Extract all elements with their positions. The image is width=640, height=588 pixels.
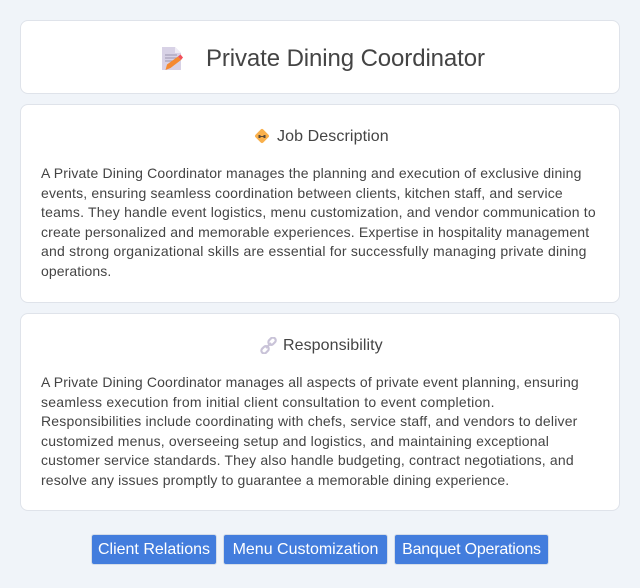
icon: diamond sign (255, 128, 269, 144)
text: job description: A Private Dining Coordinator manages the planning and execution of exclusive dining (41, 165, 582, 181)
text: responsibility: customized menus, overseeing setup and logistics, and maintaining exceptional (41, 433, 549, 449)
header card (20, 20, 620, 94)
title: Private Dining Coordinator (206, 45, 485, 72)
text: job description (41, 165, 596, 279)
text: job description: teams. They handle event logistics, menu customization, and vendor communication to (41, 204, 596, 220)
panel: job description (20, 104, 620, 303)
text: responsibility: seamless execution from initial client consultation to event completion. (41, 394, 495, 410)
text: responsibility: resolve any issues promptly to guarantee a memorable dining experience. (41, 472, 509, 488)
text: responsibility: Responsibilities include coordinating with chefs, service staff, and vendors to deliver (41, 413, 578, 429)
tag: menu customization (223, 534, 388, 565)
panel: responsibility (20, 313, 620, 511)
text: job description: create personalized and memorable experiences. Expertise in hospitality management (41, 224, 589, 240)
tag: client relations: Client Relations (98, 541, 210, 558)
heading: responsibility: Responsibility (283, 337, 383, 354)
tag: banquet operations: Banquet Operations (402, 541, 541, 558)
text: responsibility: customer service standards. They also handle budgeting, contract negotiations, and (41, 452, 574, 468)
tag: menu customization: Menu Customization (233, 541, 378, 558)
text: job description: events, ensuring seamless coordination between clients, kitchen staff, and service (41, 185, 563, 201)
tag: client relations (91, 534, 217, 565)
icon: document with pencil (162, 47, 183, 70)
text: responsibility (41, 374, 579, 488)
tag: banquet operations (394, 534, 549, 565)
icon: chain link (260, 337, 277, 354)
text: job description: and strong organizational skills are essential for successfully managing private dining (41, 243, 587, 259)
heading: job description: Job Description (277, 128, 389, 145)
text: responsibility: A Private Dining Coordinator manages all aspects of private event planning, ensuring (41, 374, 579, 390)
text: job description: operations. (41, 263, 111, 279)
